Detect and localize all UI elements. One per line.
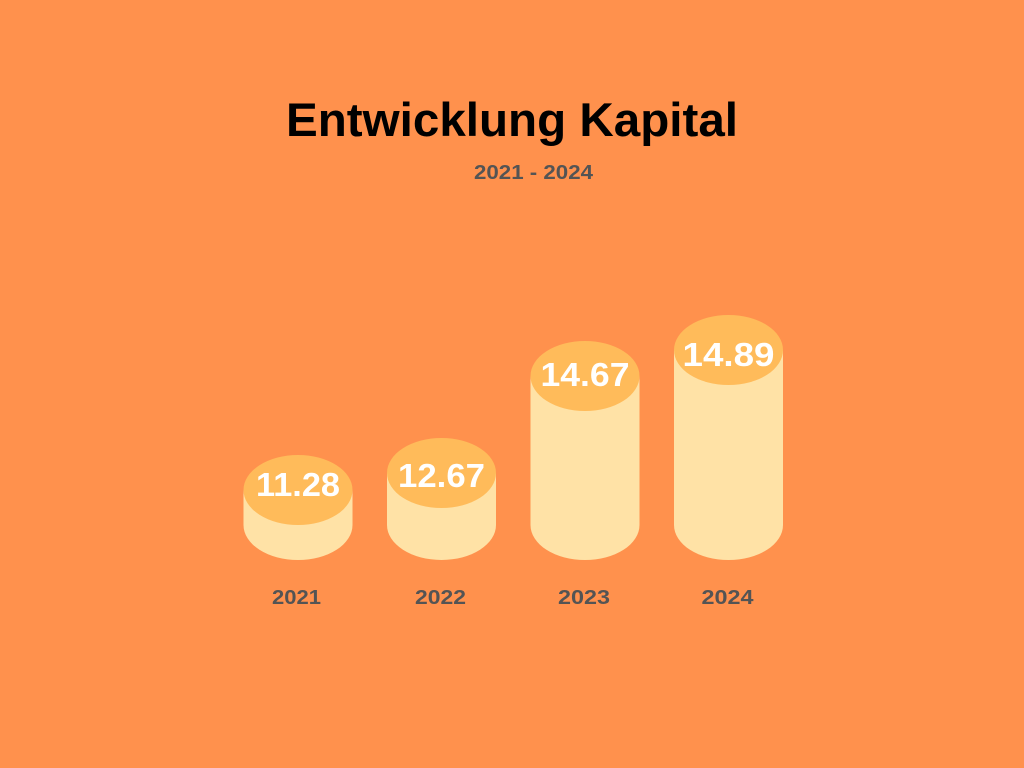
bar: 2024: [674, 315, 783, 560]
bar: 2023: 14.67: [540, 357, 630, 394]
axis label: 2022: 2022: [415, 587, 466, 609]
axis label: 2021: 2021: [272, 587, 321, 609]
bar: 2022: 12.67: [398, 458, 485, 495]
title: Entwicklung Kapital: [286, 93, 738, 146]
bar: 2024: 14.89: [682, 337, 774, 374]
bar: 2022: [387, 438, 496, 560]
axis label: 2023: 2023: [558, 587, 610, 609]
bar chart: [244, 315, 783, 560]
bar: 2021: 11.28: [256, 467, 340, 504]
bar: 2023: [530, 341, 640, 560]
bar: 2021: [244, 455, 352, 560]
subtitle: 2021 - 2024: [474, 162, 594, 184]
axis label: 2024: 2024: [702, 587, 755, 609]
